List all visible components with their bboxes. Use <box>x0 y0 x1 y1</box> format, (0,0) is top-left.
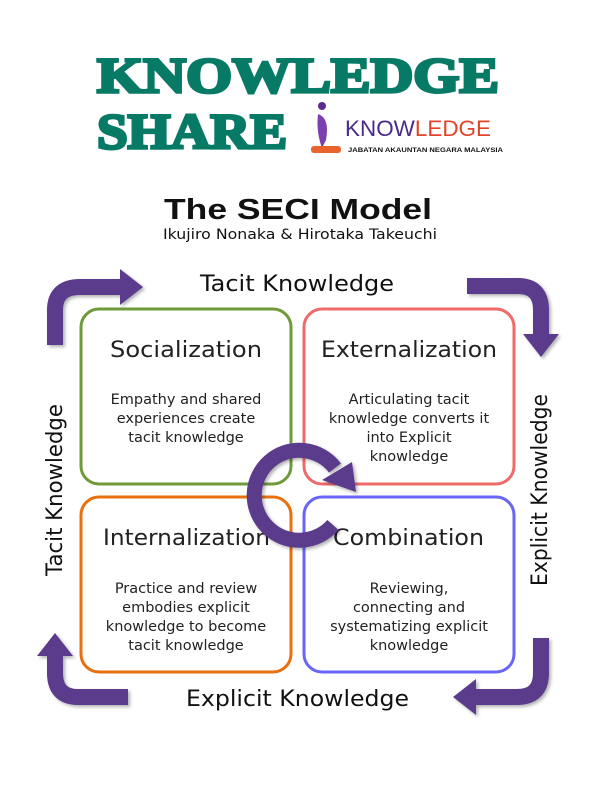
panel: combination: Reviewing, <box>370 581 448 597</box>
panel: combination <box>304 497 514 672</box>
logo <box>311 102 503 154</box>
title <box>97 47 499 159</box>
label: tacit left: Tacit Knowledge <box>43 404 68 577</box>
arrow: top-left <box>55 269 143 345</box>
arrow: center cycle <box>254 450 356 540</box>
panel: socialization <box>81 309 291 484</box>
panel: socialization: experiences create <box>117 411 255 427</box>
panel: externalization: Articulating tacit <box>349 392 470 408</box>
panel: combination: connecting and <box>353 600 465 616</box>
panel: internalization: knowledge to become <box>106 619 266 635</box>
subtitle: Ikujiro Nonaka & Hirotaka Takeuchi <box>163 227 437 243</box>
title: SHARE <box>97 103 287 159</box>
panel: combination: systematizing explicit <box>330 619 488 635</box>
panel: internalization: Practice and review <box>115 581 257 597</box>
panel: internalization: embodies explicit <box>122 600 250 616</box>
label: explicit bottom: Explicit Knowledge <box>186 687 409 712</box>
arrow: bottom-right <box>453 638 541 715</box>
panel: externalization <box>304 309 514 484</box>
panel: externalization: Externalization <box>321 338 497 363</box>
panel: externalization: into Explicit <box>366 430 452 446</box>
arrow: top-right <box>467 286 559 357</box>
panel: combination: Combination <box>333 526 484 551</box>
panel: internalization <box>81 497 291 672</box>
logo: JABATAN AKAUNTAN NEGARA MALAYSIA <box>348 147 503 154</box>
panel: internalization: Internalization <box>103 526 270 551</box>
label: explicit right: Explicit Knowledge <box>528 394 553 586</box>
panel: socialization: Empathy and shared <box>111 392 261 408</box>
arrow: bottom-left <box>37 633 128 697</box>
panel: externalization: knowledge <box>370 449 448 465</box>
panel: internalization: tacit knowledge <box>128 638 244 654</box>
label: tacit top: Tacit Knowledge <box>199 272 394 297</box>
heading: The SECI Model <box>164 194 432 226</box>
panel: externalization: knowledge converts it <box>329 411 489 427</box>
panel: combination: knowledge <box>370 638 448 654</box>
panel: socialization: tacit knowledge <box>128 430 244 446</box>
logo: KNOWLEDGE <box>345 116 491 141</box>
title: KNOWLEDGE <box>97 47 499 103</box>
panel: socialization: Socialization <box>110 338 262 363</box>
